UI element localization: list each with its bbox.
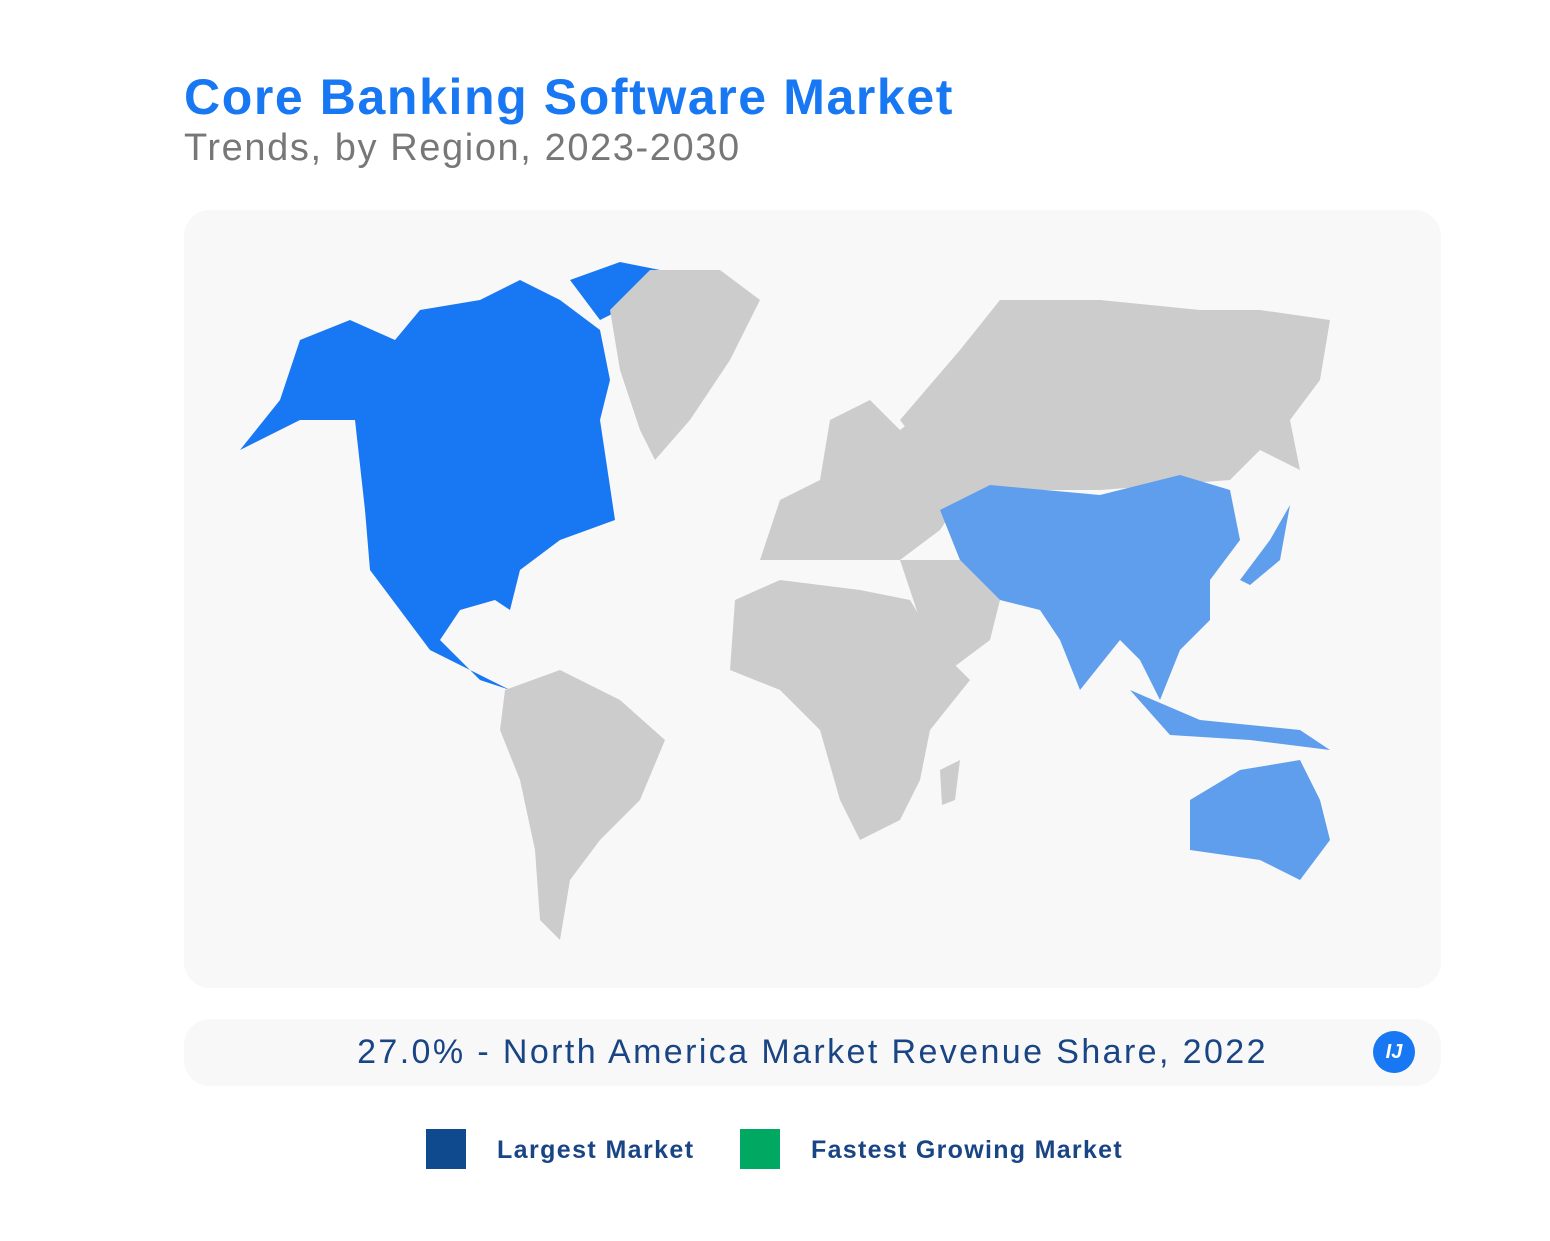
- stat bar: [184, 1019, 1441, 1086]
- legend: fastest: [740, 1129, 780, 1169]
- stat text: 27.0% - North America Market Revenue Share, 2022: [357, 1033, 1268, 1071]
- legend: Largest Market: [497, 1136, 694, 1164]
- title: Core Banking Software Market: [184, 69, 954, 125]
- subtitle: Trends, by Region, 2023-2030: [184, 127, 741, 169]
- panel: map: [184, 210, 1441, 988]
- legend: Fastest Growing Market: [811, 1136, 1123, 1164]
- map: north america: [240, 262, 660, 690]
- map: rest of world: [500, 270, 1330, 940]
- legend: [426, 1129, 1123, 1169]
- icon: logo: IJ: [1386, 1041, 1402, 1063]
- legend: largest: [426, 1129, 466, 1169]
- map: asia pacific: [940, 475, 1330, 880]
- icon: logo: [1373, 1031, 1415, 1073]
